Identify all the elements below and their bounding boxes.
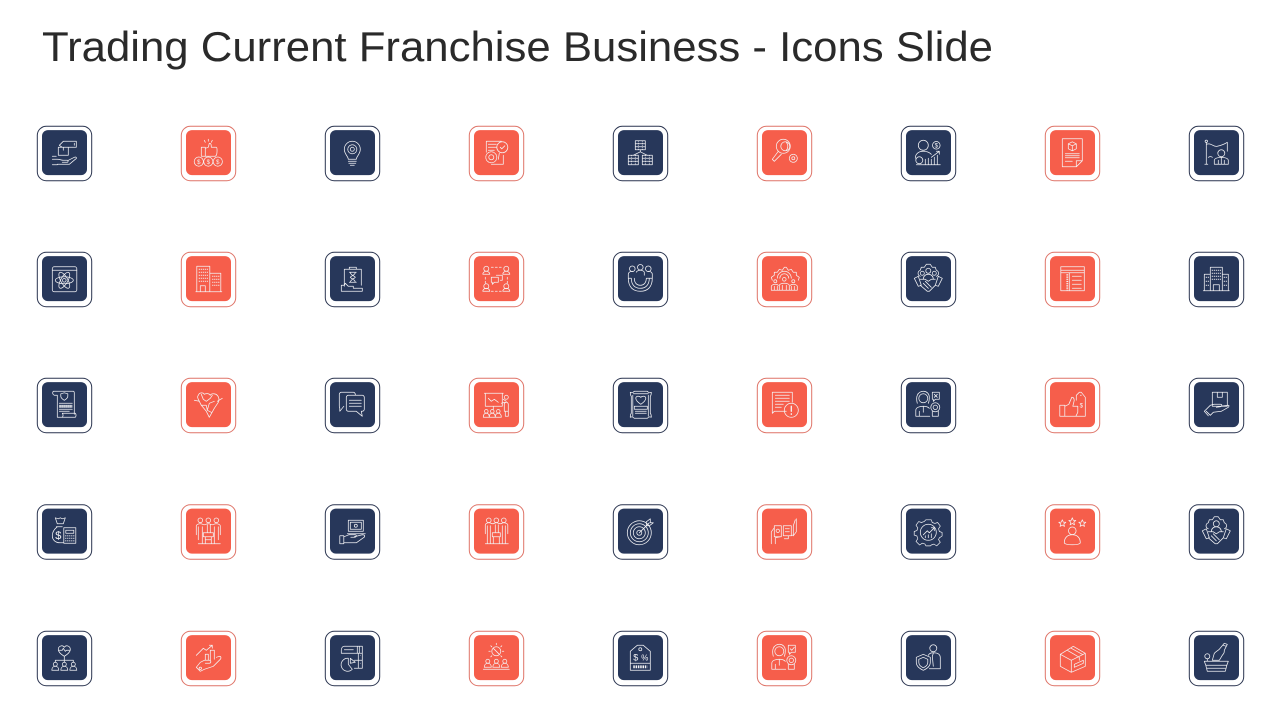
icon: idea bulb above three people	[483, 643, 509, 669]
tile: hand with growth	[181, 631, 236, 686]
icon: three people with desk	[196, 518, 220, 544]
tile: presentation	[469, 378, 524, 433]
icon: clipboard with hourglass and hand	[341, 267, 362, 291]
icon: price tag with dollar and percent	[630, 645, 650, 670]
tile: hand holding parcel	[1189, 378, 1244, 433]
icon: businesswoman with approval and seal	[772, 644, 796, 669]
tile: thumbs up and tag	[1045, 378, 1100, 433]
icon: ornate frame with heart	[630, 391, 651, 418]
tile: report with alert	[757, 378, 812, 433]
tile: hand with gear and people	[1189, 505, 1244, 559]
icon: audience at a presentation board	[483, 393, 508, 417]
tile: document with box	[1045, 126, 1100, 181]
tile: layout window	[1045, 252, 1100, 307]
icon: heart connected to three people	[52, 646, 77, 670]
tile: idea and people	[469, 631, 524, 686]
icon: hand holding a box	[1204, 392, 1229, 416]
icon: target with arrow	[627, 519, 653, 545]
icon: thumbs up with three dollar coins: $	[216, 160, 220, 166]
tile: certificate scroll	[37, 378, 92, 433]
tile: document with gear and magnifier	[469, 126, 524, 181]
icon: thumbs up with price tag: $	[1080, 403, 1084, 409]
icon: document, gear, magnifier	[486, 141, 508, 164]
icon: handshake under gear with people	[1202, 517, 1230, 544]
icon: person behind protective shield	[916, 645, 940, 670]
tile: hand holding box and tag	[37, 126, 92, 181]
icon: message with exclamation mark	[772, 392, 798, 417]
icon: three people standing	[485, 518, 508, 544]
tile: person with shield	[901, 631, 956, 686]
tile: magnifier with gear	[757, 126, 812, 181]
icon: hand holding rising bars and arrow	[196, 645, 221, 671]
tile: person with finance chart	[901, 126, 956, 181]
tile: heart cluster	[181, 378, 236, 433]
icon: team discussion	[483, 266, 510, 291]
icon: thumbs up with three dollar coins: $	[207, 160, 211, 166]
tile: buildings	[181, 252, 236, 307]
tile: light bulb	[325, 126, 380, 181]
icon: bulb with gear	[344, 141, 360, 165]
icon: open cardboard box	[1060, 646, 1085, 672]
tile: hands with phone and document	[757, 505, 812, 559]
tile: team group	[469, 505, 524, 559]
icon: three table blocks	[628, 141, 652, 165]
tile: hand with banknote	[325, 505, 380, 559]
tile: gear with chart	[901, 505, 956, 559]
icon: price tag with dollar and percent: %	[641, 653, 648, 662]
tile: chat bubbles	[325, 378, 380, 433]
icon: businesswoman with rejection bubble and seal	[916, 391, 940, 416]
icon: magnet attracting three people	[628, 264, 652, 291]
tile: price tag with dollar and percent	[613, 631, 668, 686]
icon: person in front of flag	[1205, 140, 1228, 164]
tile: target	[613, 505, 668, 559]
icon: gift basket with champagne	[1204, 643, 1228, 671]
tile: thumbs up and coins	[181, 126, 236, 181]
icon: investor with coins and growth bars: $	[935, 143, 939, 149]
icon: money bag with calculator: $	[55, 530, 61, 542]
tile: window with atom	[37, 252, 92, 307]
icon: thumbs up with three dollar coins	[194, 139, 222, 166]
tile: team at podium	[181, 505, 236, 559]
tile: four people with chat	[469, 252, 524, 307]
tile: office building	[1189, 252, 1244, 307]
icon: triangle of hearts	[194, 393, 222, 417]
icon: gear with rising chart	[914, 520, 942, 546]
icon: thumbs up with three dollar coins: $	[197, 160, 201, 166]
tile: server with pie	[325, 631, 380, 686]
tile: rated person	[1045, 505, 1100, 559]
tile: parcel box	[1045, 631, 1100, 686]
icon: gear with signal and people	[771, 267, 799, 290]
title: Trading Current Franchise Business - Icons Slide	[42, 23, 993, 70]
tile: framed heart	[613, 378, 668, 433]
icon: price tag with dollar and percent: $	[633, 652, 638, 662]
icon: two speech bubbles	[339, 392, 364, 416]
icon: hand with box and tag	[52, 141, 76, 165]
icon: scroll with shield	[53, 391, 76, 417]
tile: handshake with gear	[901, 252, 956, 307]
tile: flag and person	[1189, 126, 1244, 181]
icon: handshake under gear of people	[914, 264, 942, 291]
icon: web page layout	[1061, 267, 1084, 291]
icon: tower block with wings	[1203, 267, 1229, 291]
tile: gear with network	[757, 252, 812, 307]
tile: heart over people	[37, 631, 92, 686]
icon: person with three stars	[1059, 518, 1086, 545]
tile: clipboard with hourglass	[325, 252, 380, 307]
icon: page with cube and folded corner	[1062, 139, 1082, 167]
tile: woman with check badge	[757, 631, 812, 686]
tile: woman with badge	[901, 378, 956, 433]
icon: magnifier and small gear	[772, 139, 797, 162]
tile: hierarchy of grids	[613, 126, 668, 181]
tile: people and magnet	[613, 252, 668, 307]
icon: server rack and pie chart	[341, 646, 362, 671]
icon: two office buildings	[196, 266, 222, 292]
icon: hand with cash screen	[340, 520, 365, 544]
tile: money bag and calculator	[37, 505, 92, 559]
icon: browser window with atom	[52, 267, 77, 292]
tile: basket with bottle	[1189, 631, 1244, 686]
icon: hands exchanging phone and paper	[771, 519, 796, 544]
